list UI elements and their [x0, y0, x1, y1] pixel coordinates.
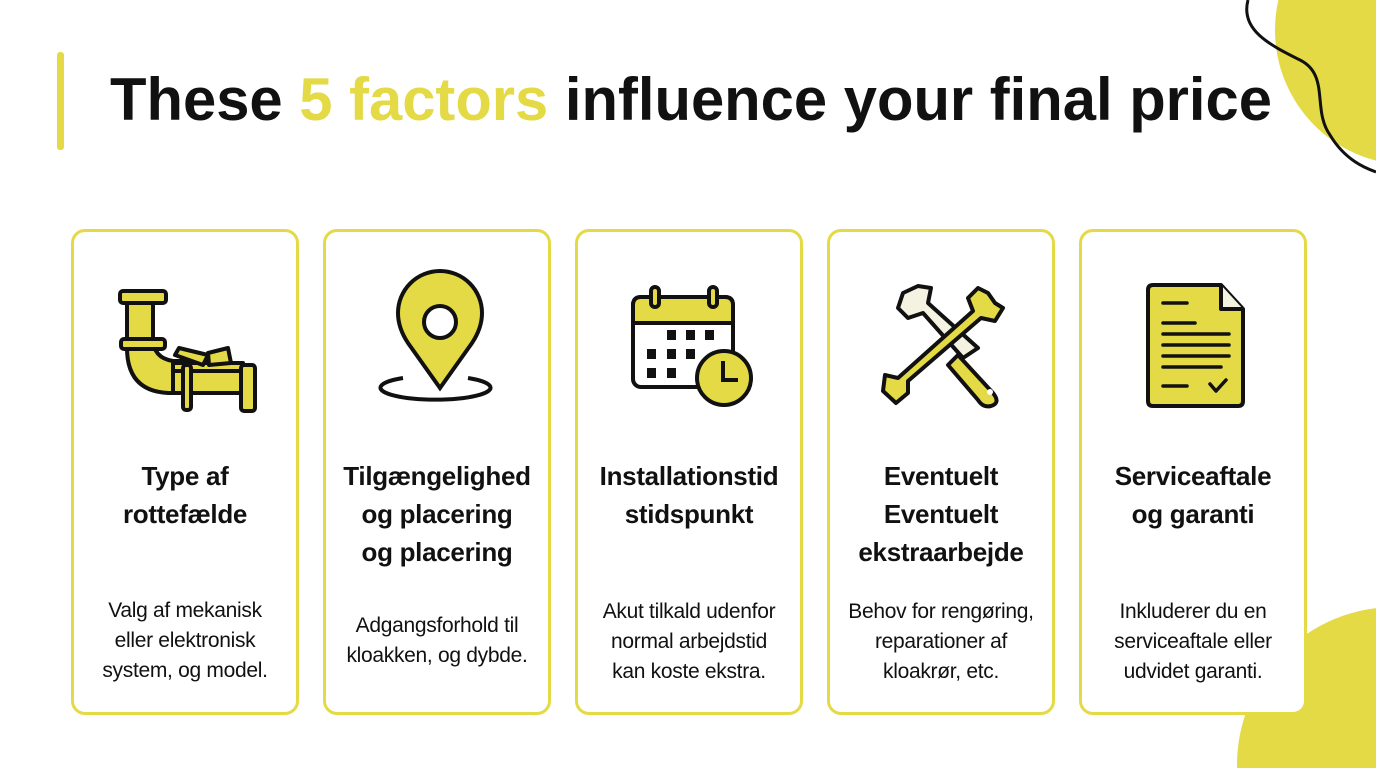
- heading: rottefælde: [123, 499, 247, 529]
- description: serviceaftale eller: [1114, 630, 1272, 653]
- description: kan koste ekstra.: [612, 660, 766, 683]
- heading: Eventuelt: [884, 499, 998, 529]
- heading: Installationstid: [600, 461, 778, 491]
- title: These 5 factors influence your final price: [110, 66, 1272, 133]
- icon: calendar: [631, 285, 753, 407]
- description: Valg af mekanisk: [108, 599, 262, 622]
- description: [102, 599, 268, 682]
- icon: tools: [881, 284, 1006, 408]
- description: [346, 614, 528, 667]
- description: Behov for rengøring,: [848, 600, 1034, 623]
- description: [848, 600, 1034, 683]
- description: system, og model.: [102, 659, 268, 682]
- description: Inkluderer du en: [1120, 600, 1266, 623]
- heading: [123, 461, 247, 529]
- description: udvidet garanti.: [1124, 660, 1262, 683]
- heading: og placering: [362, 537, 512, 567]
- heading: [600, 461, 778, 529]
- description: reparationer af: [875, 630, 1007, 653]
- heading: [343, 461, 531, 567]
- heading: og placering: [362, 499, 512, 529]
- card 4: [827, 229, 1055, 715]
- heading: og garanti: [1132, 499, 1254, 529]
- accent bar: [57, 52, 64, 150]
- description: eller elektronisk: [115, 629, 255, 652]
- card 3: [575, 229, 803, 715]
- heading: stidspunkt: [625, 499, 753, 529]
- heading: [1115, 461, 1271, 529]
- card 1: [71, 229, 299, 715]
- heading: [858, 461, 1024, 567]
- description: kloakken, og dybde.: [346, 644, 528, 667]
- description: kloakrør, etc.: [883, 660, 999, 683]
- icon: pipe: [118, 289, 257, 413]
- icon: document: [1146, 283, 1245, 408]
- description: [1114, 600, 1272, 683]
- card 5: [1079, 229, 1307, 715]
- heading: Eventuelt: [884, 461, 998, 491]
- description: normal arbejdstid: [611, 630, 767, 653]
- description: Adgangsforhold til: [356, 614, 518, 637]
- description: Akut tilkald udenfor: [603, 600, 775, 623]
- heading: Type af: [142, 461, 228, 491]
- card 2: [323, 229, 551, 715]
- description: [602, 600, 776, 683]
- icon: location pin: [378, 269, 493, 402]
- heading: ekstraarbejde: [858, 537, 1024, 567]
- heading: Tilgængelighed: [343, 461, 531, 491]
- heading: Serviceaftale: [1115, 461, 1271, 491]
